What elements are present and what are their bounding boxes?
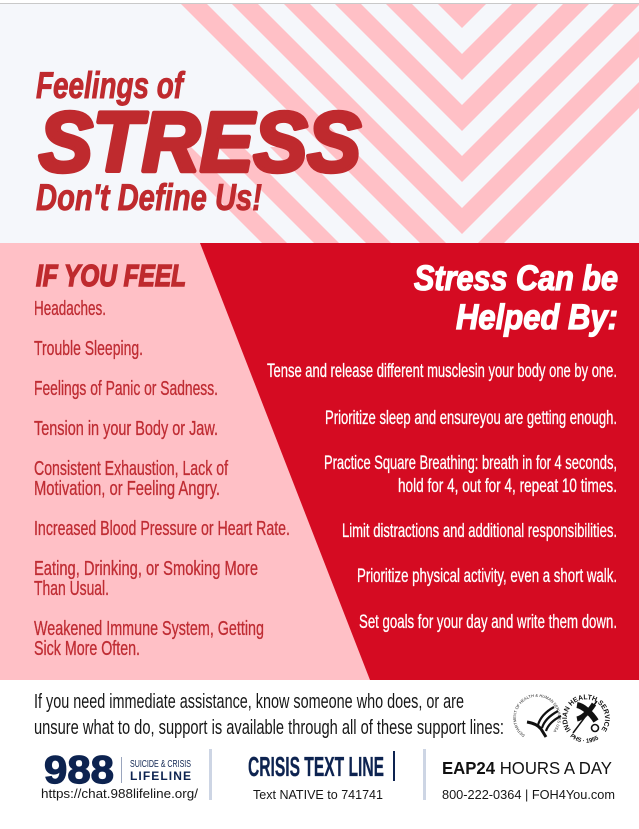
title (36, 65, 361, 218)
symptom list: Trouble Sleeping. (34, 338, 143, 360)
lower-left chevron stripes (170, 147, 391, 243)
symptom list (34, 298, 290, 660)
footer message: If you need immediate assistance, know someone who does, or are (34, 691, 464, 713)
heading: Stress Can be Helped By (414, 259, 618, 337)
help list (267, 361, 617, 633)
symptom list: Weakened Immune System, Getting (34, 618, 264, 640)
symptom list: Feelings of Panic or Sadness. (34, 378, 218, 400)
heading: Stress Can be Helped By: Helped By: (456, 298, 618, 337)
link: 988 chat: https://chat.988lifeline.org/ (41, 787, 199, 801)
text: NATIVE to 741741: Text NATIVE to 741741 (253, 787, 383, 802)
icon: Indian Health Service seal: INDIAN HEALTH SERVICE (562, 694, 610, 732)
text: EAP contact: 800-222-0364 | FOH4You.com (442, 787, 615, 802)
text: EAP24 hours: EAP24 HOURS A DAY (442, 758, 612, 778)
symptom list: Sick More Often. (34, 638, 140, 660)
logo: 988 Lifeline: SUICIDE & CRISIS (130, 759, 191, 770)
symptom list: Increased Blood Pressure or Heart Rate. (34, 518, 290, 540)
logo: Crisis Text Line: CRISIS TEXT LINE (248, 751, 384, 782)
title word: STRESS: STRESS (39, 95, 361, 189)
panel: header band (0, 3, 639, 243)
icon: HHS seal: DEPARTMENT OF HEALTH & HUMAN SERVICES USA (513, 694, 561, 738)
symptom list: Headaches. (34, 298, 106, 320)
symptom list: Tension in your Body or Jaw. (34, 418, 218, 440)
chevron stripe pattern (181, 4, 639, 243)
logo: 988 Lifeline (44, 749, 191, 792)
panel: symptoms (pink) (0, 243, 370, 680)
title line: Feelings of: Feelings of (36, 65, 186, 106)
title line: Don't Define Us: Don′t Define Us! (36, 177, 262, 218)
symptom list: Consistent Exhaustion, Lack of (34, 458, 228, 480)
symptom list: Motivation, or Feeling Angry. (34, 478, 220, 500)
icon: Indian Health Service seal: PHS · 1955 (570, 734, 598, 743)
panel: helps (red) (200, 243, 639, 680)
footer message (34, 691, 504, 739)
heading: IF YOU FEEL: IF YOU FEEL (36, 258, 186, 293)
logo: 988 Lifeline: LIFELINE (130, 769, 191, 783)
divider (423, 749, 426, 800)
divider (209, 749, 212, 800)
symptom list: Than Usual. (34, 578, 109, 600)
symptom list: Eating, Drinking, or Smoking More (34, 558, 258, 580)
logo: 988 Lifeline: 988 (44, 749, 114, 792)
